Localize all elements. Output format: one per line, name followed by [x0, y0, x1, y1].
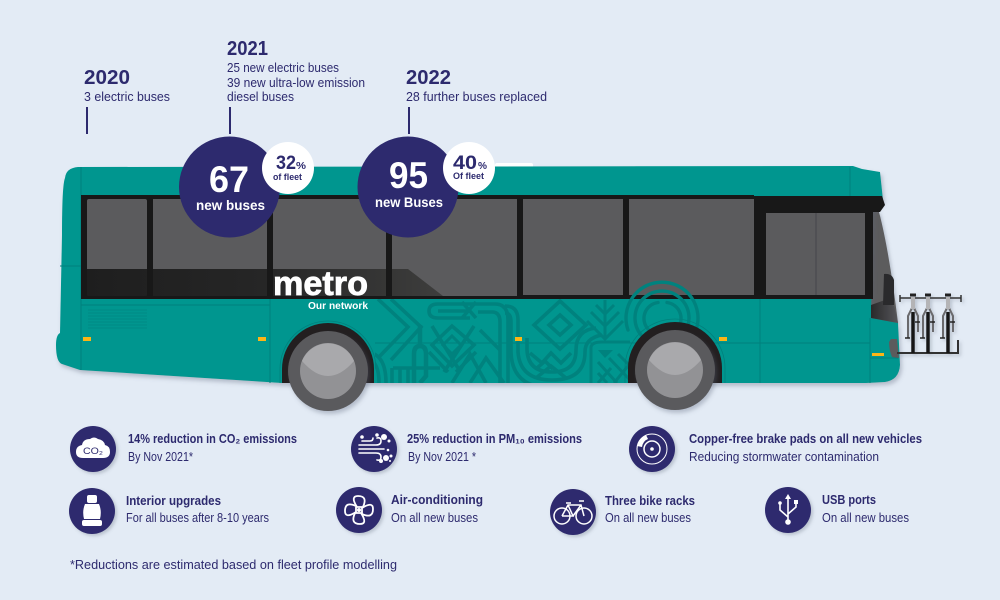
badge: 40% of fleet: Of fleet: [453, 171, 485, 182]
feature: interior upgrades: Interior upgrades: [126, 494, 221, 508]
timeline: 2020: 2020: [84, 67, 130, 89]
feature: USB ports: [765, 487, 909, 533]
timeline: 2021: [227, 38, 365, 134]
concentric arcs above front wheel: [626, 282, 698, 335]
icon: CO2 cloud: [70, 426, 116, 472]
icon: CO2 cloud: CO₂: [83, 446, 103, 457]
timeline: 2022: 2022: [406, 67, 451, 89]
icon: particles and wind: [351, 426, 397, 472]
timeline: 2021: 2021: [227, 38, 268, 60]
front bumper recess: [889, 339, 899, 358]
badge: 32% of fleet: of fleet: [273, 172, 303, 183]
feature: three bike racks: On all new buses: [605, 511, 691, 525]
feature: CO2 reduction: By Nov 2021*: [128, 450, 193, 464]
rear wheel: [288, 331, 368, 411]
bus illustration: [56, 163, 961, 411]
feature: interior upgrades: [69, 488, 269, 534]
side windows: [87, 199, 865, 296]
feature: three bike racks: Three bike racks: [605, 494, 695, 508]
feature: USB ports: USB ports: [822, 493, 876, 507]
timeline: 2021: 39 new ultra-low emission: [227, 76, 365, 90]
badge: 40% of fleet: 40: [453, 153, 477, 174]
feature: CO2 reduction: 14% reduction in CO₂ emissions: [128, 432, 297, 446]
icon: seat: [69, 488, 115, 534]
metro logo: metro: [273, 265, 368, 303]
icon: bicycle: [550, 489, 596, 535]
icon: USB symbol: [765, 487, 811, 533]
feature: interior upgrades: For all buses after 8-10 years: [126, 511, 269, 525]
timeline: 2021: 25 new electric buses: [227, 61, 339, 75]
icon: brake disc: [629, 426, 675, 472]
wheel arches: [282, 322, 722, 383]
window band: [81, 195, 885, 299]
timeline: 2020: [84, 67, 170, 134]
bike rack: [897, 295, 961, 353]
front cowl: [871, 300, 898, 323]
feature: three bike racks: [550, 489, 695, 535]
feature: copper-free brake pads: Copper-free brake pads on all new vehicles: [689, 432, 922, 446]
badge: 67 new buses: 67: [209, 159, 249, 200]
feature: air-conditioning: On all new buses: [391, 511, 478, 525]
feature: PM10 reduction: [351, 426, 582, 472]
feature: air-conditioning: [336, 487, 483, 533]
timeline: 2020: 3 electric buses: [84, 90, 170, 104]
front wheel: [635, 330, 715, 410]
feature: air-conditioning: Air-conditioning: [391, 493, 483, 507]
bus body: [56, 166, 900, 383]
badge: 95 new buses: new Buses: [375, 194, 443, 210]
maori-style pattern: [372, 299, 630, 388]
icon: fan: [336, 487, 382, 533]
badge: 67 new buses: new buses: [196, 197, 265, 213]
feature: USB ports: On all new buses: [822, 511, 909, 525]
feature: PM10 reduction: 25% reduction in PM₁₀ emissions: [407, 432, 582, 446]
feature: copper-free brake pads: [629, 426, 922, 472]
body panel lines: [60, 167, 898, 383]
timeline: 2021: diesel buses: [227, 90, 294, 104]
door divider: [815, 213, 817, 295]
badge: 95 new buses: [358, 136, 458, 238]
feature: PM10 reduction: By Nov 2021 *: [408, 450, 476, 464]
badge: 95 new buses: 95: [389, 155, 428, 196]
badge: 40% of fleet: [443, 142, 495, 194]
badge: 67 new buses: [179, 136, 280, 238]
side mirror: [883, 274, 894, 305]
window pillars over reflection: [150, 269, 389, 296]
feature: copper-free brake pads: Reducing stormwater contamination: [689, 450, 879, 464]
badge: 40% of fleet: %: [478, 161, 487, 172]
footnote: *Reductions are estimated based on fleet profile modelling: [70, 557, 397, 572]
feature: CO2 reduction: [70, 426, 297, 472]
badge: 32% of fleet: 32: [276, 153, 296, 174]
window reflection band: [87, 269, 443, 296]
headlight: [872, 353, 884, 356]
roof unit: [495, 163, 533, 169]
windscreen: [870, 212, 898, 323]
badge: 32% of fleet: %: [296, 161, 306, 172]
side marker lights: [83, 337, 727, 341]
metro logo: Our network: [308, 301, 368, 312]
badge: 32% of fleet: [262, 142, 314, 194]
timeline: 2022: 28 further buses replaced: [406, 90, 547, 104]
timeline: 2022: [406, 67, 547, 134]
